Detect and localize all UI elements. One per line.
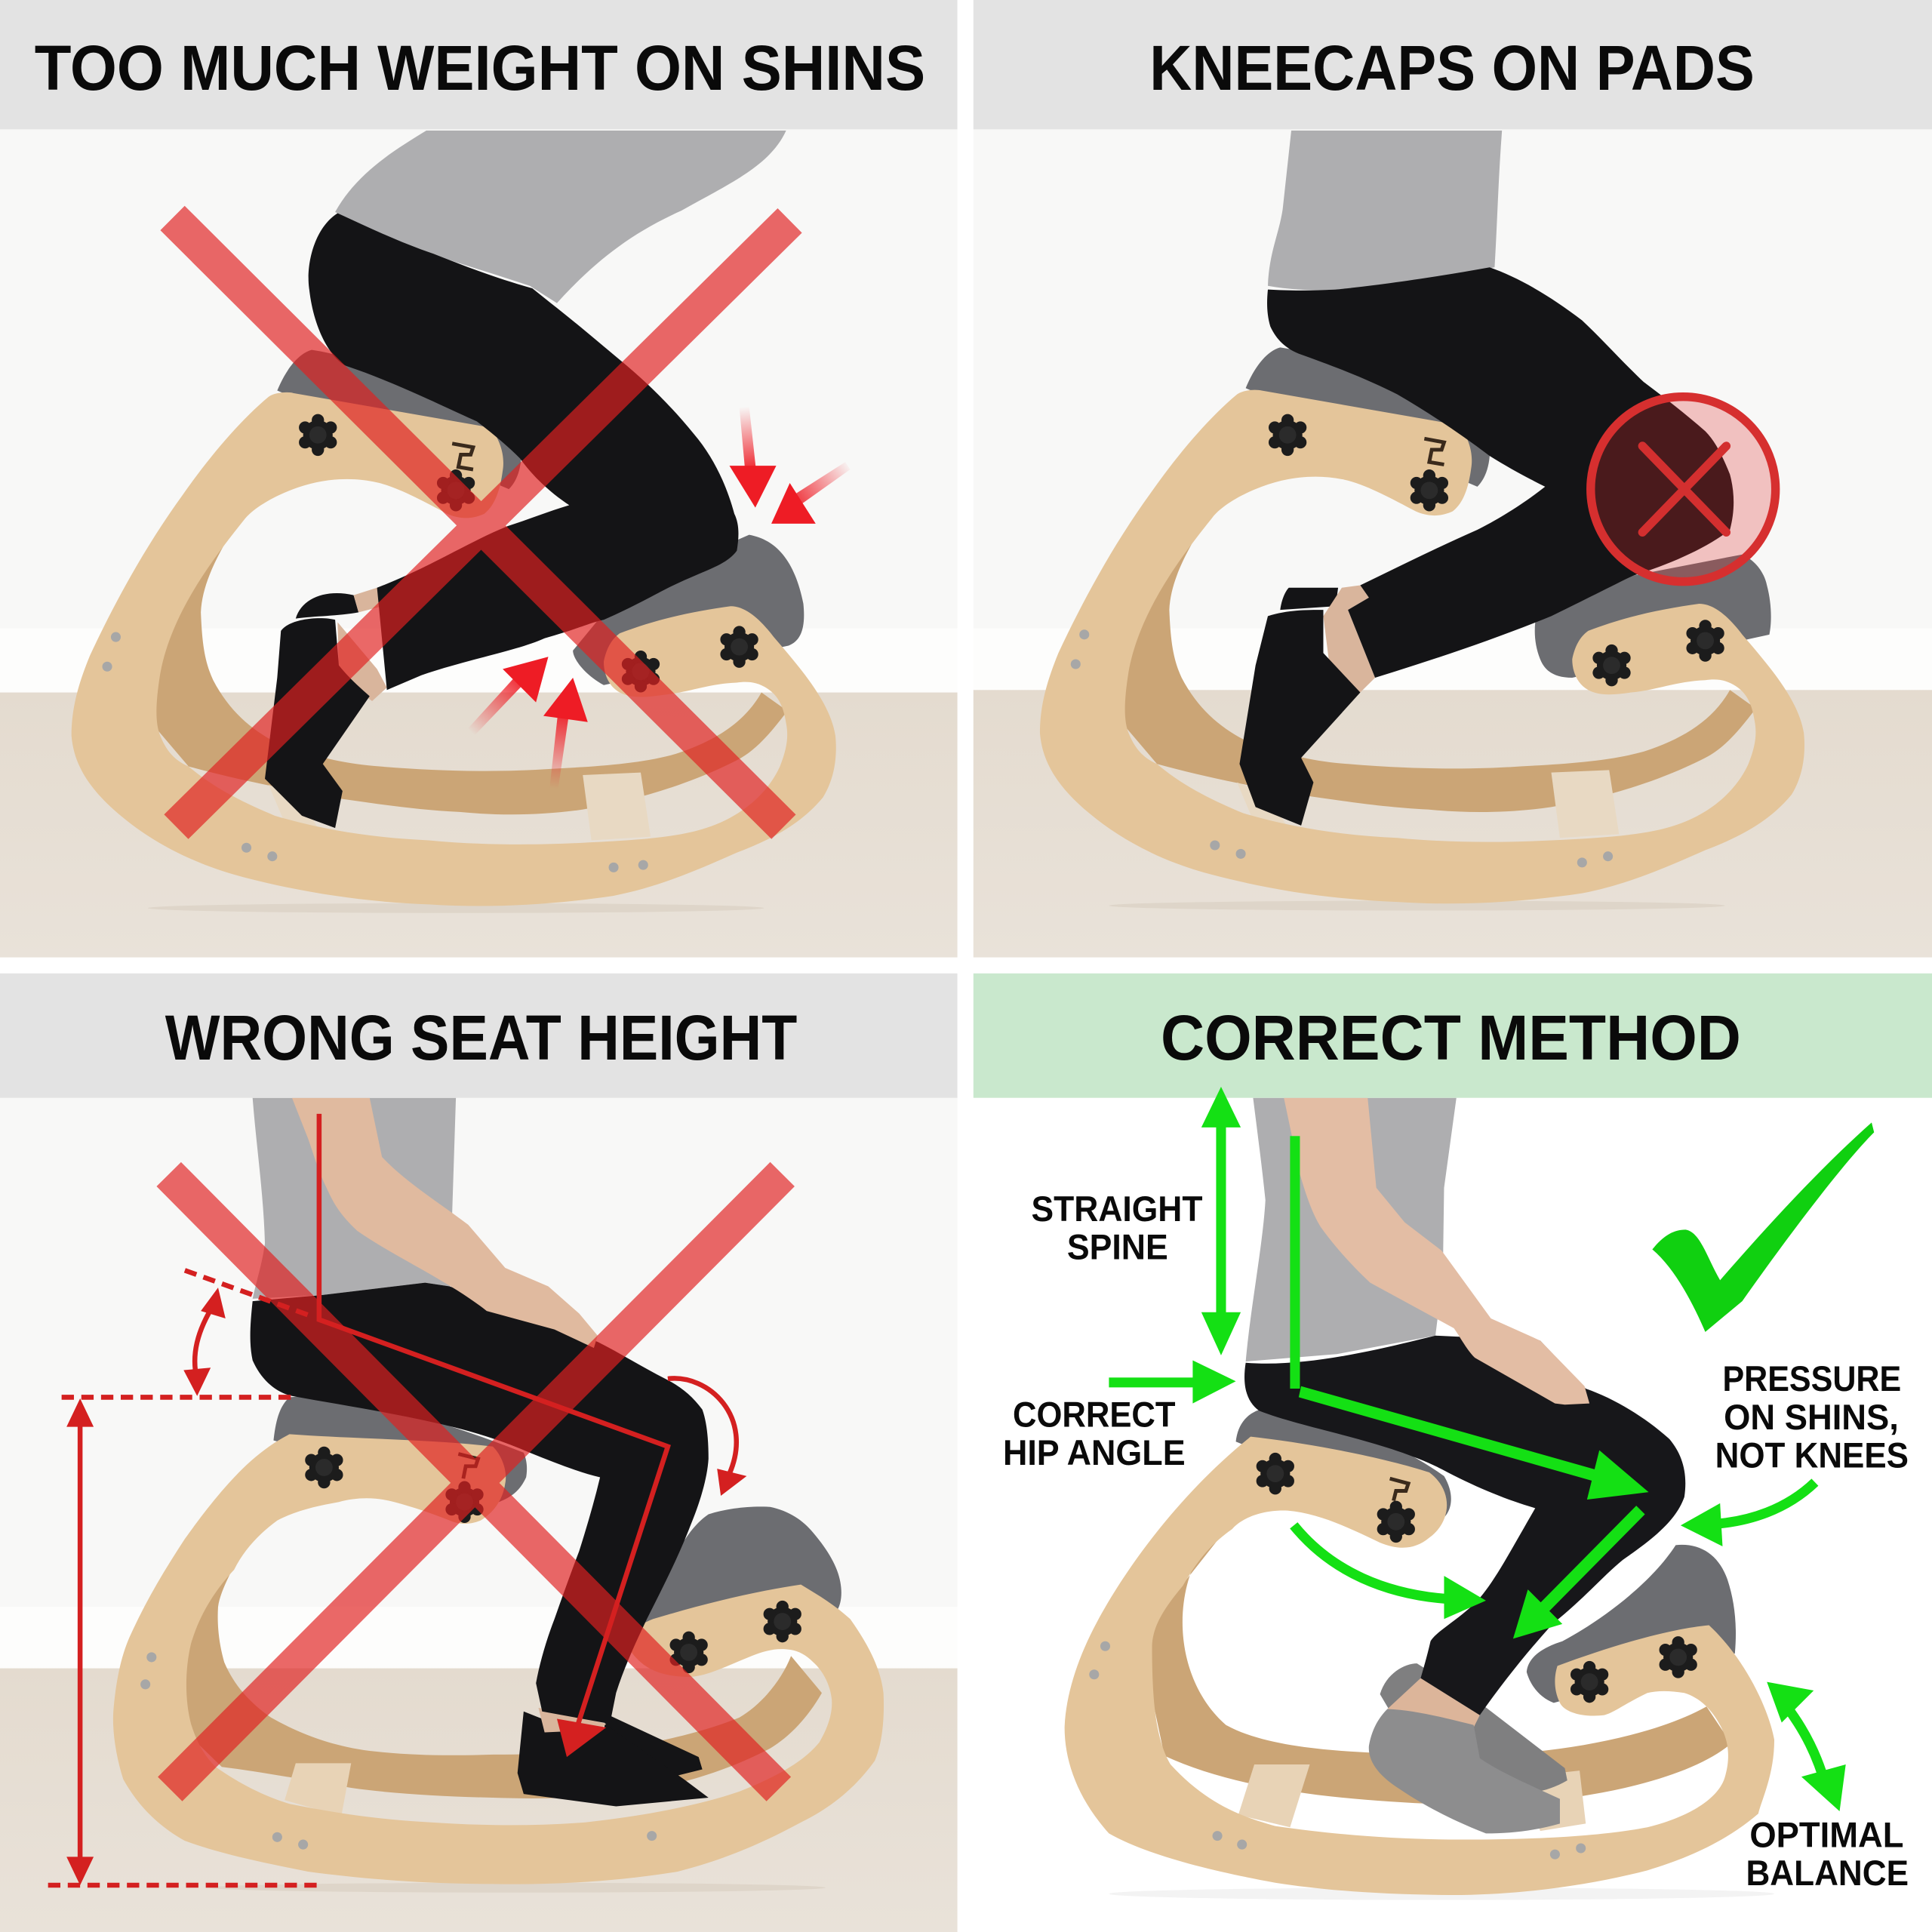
label: pressure on shins: NOT KNEES [1715, 1435, 1909, 1475]
rocking chair [1065, 1407, 1774, 1895]
person: correct posture [1244, 1098, 1685, 1833]
room background [974, 129, 1932, 958]
label: optimal balance: BALANCE [1746, 1854, 1909, 1894]
label: straight spine: SPINE [1067, 1228, 1168, 1268]
header bar [974, 974, 1932, 1098]
label: pressure on shins: ON SHINS, [1724, 1398, 1899, 1438]
room background [0, 1097, 958, 1932]
arrow: correct hip angle [1109, 1360, 1236, 1404]
red cross [169, 1174, 783, 1789]
rocking chair [1040, 347, 1804, 903]
icon: green check mark [1652, 1122, 1874, 1332]
label: pressure on shins [1715, 1359, 1909, 1475]
header bar: KNEECAPS ON PADS [1149, 32, 1755, 103]
label: correct hip angle: CORRECT [1013, 1395, 1176, 1435]
rocking chair [113, 1396, 884, 1884]
panel: correct method [974, 974, 1932, 1932]
red angle and height annotations [48, 1114, 746, 1885]
red cross [173, 218, 790, 827]
arrow: curved under thigh [1294, 1525, 1486, 1619]
header bar: CORRECT METHOD [1161, 1001, 1741, 1073]
person: knees on pads [1239, 131, 1734, 826]
label: correct hip angle: HIP ANGLE [1003, 1433, 1186, 1473]
header bar: TOO MUCH WEIGHT ON SHINS [35, 32, 925, 103]
header bar [974, 0, 1932, 129]
green posture lines [1290, 1136, 1648, 1638]
arrow: optimal balance [1767, 1682, 1846, 1811]
header bar [0, 974, 958, 1098]
arrow: pressure on shins [1681, 1482, 1815, 1546]
label: correct hip angle [1003, 1395, 1186, 1473]
room background [0, 129, 958, 958]
person: seated too high [251, 1098, 709, 1806]
label: straight spine: STRAIGHT [1032, 1189, 1203, 1229]
panel: wrong seat height [0, 974, 958, 1932]
label: optimal balance [1746, 1815, 1909, 1894]
label: optimal balance: OPTIMAL [1749, 1815, 1903, 1855]
label: pressure on shins: PRESSURE [1722, 1359, 1901, 1399]
rocking chair [72, 350, 836, 906]
person: seated leaning forward [265, 131, 786, 828]
icon: knee warning circle [1591, 397, 1776, 582]
panel: kneecaps on pads [974, 0, 1932, 958]
arrow: straight spine [1201, 1087, 1241, 1355]
header bar: WRONG SEAT HEIGHT [165, 1001, 797, 1073]
panel: too much weight on shins [0, 0, 958, 958]
pressure arrows [468, 407, 851, 789]
label: straight spine [1032, 1189, 1203, 1268]
background [974, 1097, 1932, 1932]
header bar [0, 0, 958, 129]
